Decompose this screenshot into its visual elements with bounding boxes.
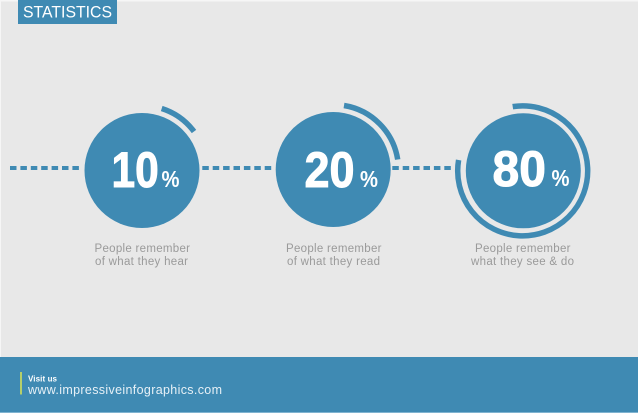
value 80: 80 (492, 142, 546, 197)
dashed connector 3 (392, 166, 452, 170)
circle 2 (276, 112, 391, 227)
percent sign 3: % (552, 165, 569, 191)
percent sign 2: % (360, 166, 378, 192)
percent sign 1: % (162, 166, 179, 192)
caption 2: People remember (286, 243, 382, 255)
caption 2 (286, 243, 382, 268)
footer band (0, 357, 638, 413)
value 10: 10 (112, 142, 159, 198)
caption 3: People remember (475, 243, 571, 255)
footer accent bar (20, 372, 22, 394)
progress arc 3 (458, 106, 588, 236)
dashed connector 1 (10, 166, 79, 170)
caption 3 (470, 243, 574, 268)
caption 2: of what they read (287, 256, 380, 268)
circle 1 (84, 113, 200, 228)
caption 1: of what they hear (95, 256, 188, 268)
value 20: 20 (304, 143, 355, 199)
footer url: www.impressiveinfographics.com (27, 383, 222, 397)
title: STATISTICS (23, 4, 112, 22)
dashed connector 2 (202, 166, 272, 170)
stat: 80 percent (458, 106, 588, 268)
stat: 20 percent (276, 106, 398, 268)
caption 1 (94, 243, 190, 268)
caption 1: People remember (94, 243, 190, 255)
progress arc 1 (162, 108, 194, 132)
stat: 10 percent (84, 108, 200, 268)
progress arc 2 (344, 106, 398, 160)
caption 3: what they see & do (470, 256, 574, 268)
circle 3 (466, 113, 581, 228)
footer label: Visit us (28, 374, 58, 384)
